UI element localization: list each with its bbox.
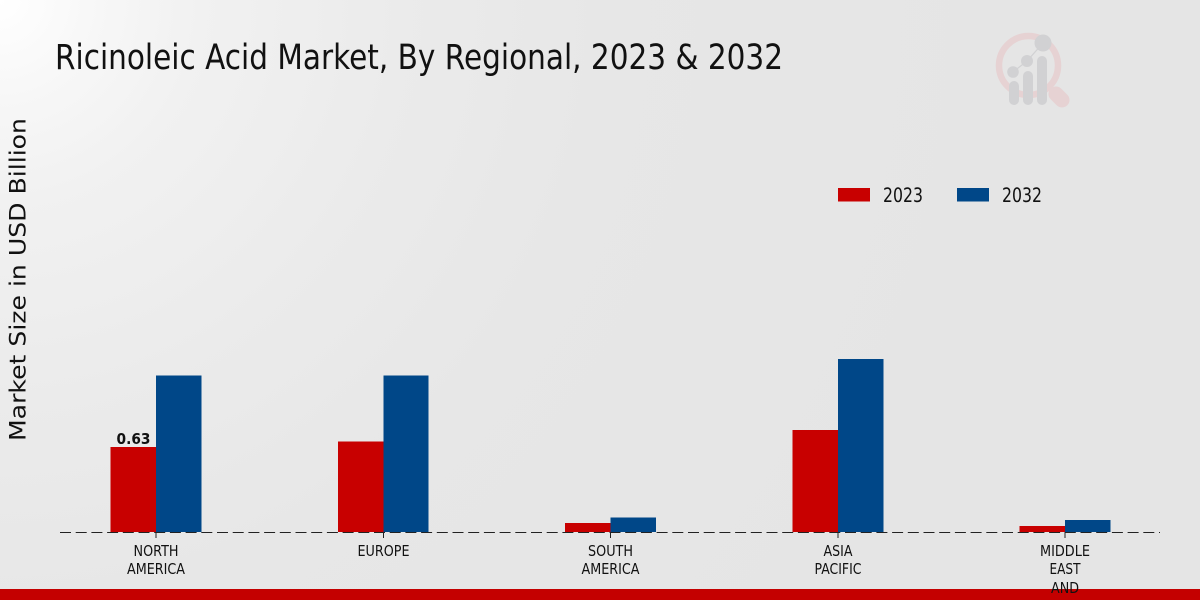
legend: 2023: 2023 — [883, 184, 923, 207]
label: North America: NORTH — [134, 542, 178, 560]
legend: 2023 — [838, 184, 923, 207]
legend: 2032 — [957, 184, 1042, 207]
legend — [838, 184, 1042, 207]
label: Middle East and Africa — [1040, 542, 1090, 597]
bars: Asia Pacific — [792, 359, 884, 532]
x-axis labels — [127, 542, 1090, 597]
label: South America — [582, 542, 640, 578]
bars: Europe — [338, 376, 428, 532]
label: Asia Pacific — [814, 542, 862, 578]
data label: 0.63: 0.63 — [116, 430, 150, 448]
label: North America: AMERICA — [127, 560, 185, 578]
label: Europe: EUROPE — [358, 542, 410, 560]
legend: 2032: 2032 — [1002, 184, 1042, 207]
label: Asia Pacific: PACIFIC — [814, 560, 862, 578]
label: Middle East and Africa: AND — [1051, 579, 1079, 597]
bars: South America — [565, 518, 656, 532]
bars: North America — [110, 376, 202, 532]
bar chart — [110, 359, 1110, 532]
label: Middle East and Africa: EAST — [1050, 560, 1081, 578]
x-axis baseline — [60, 532, 1160, 538]
y-axis label: Market Size in USD Billion — [6, 118, 32, 441]
label: North America — [127, 542, 185, 578]
label: South America: AMERICA — [582, 560, 640, 578]
icon: watermark logo — [999, 34, 1062, 105]
bars: Middle East and Africa — [1020, 520, 1110, 532]
label: South America: SOUTH — [588, 542, 633, 560]
title: Ricinoleic Acid Market, By Regional, 2023 & 2032 — [55, 38, 783, 78]
label: Asia Pacific: ASIA — [824, 542, 853, 560]
label: Middle East and Africa: MIDDLE — [1040, 542, 1090, 560]
bottom band — [0, 589, 1200, 600]
